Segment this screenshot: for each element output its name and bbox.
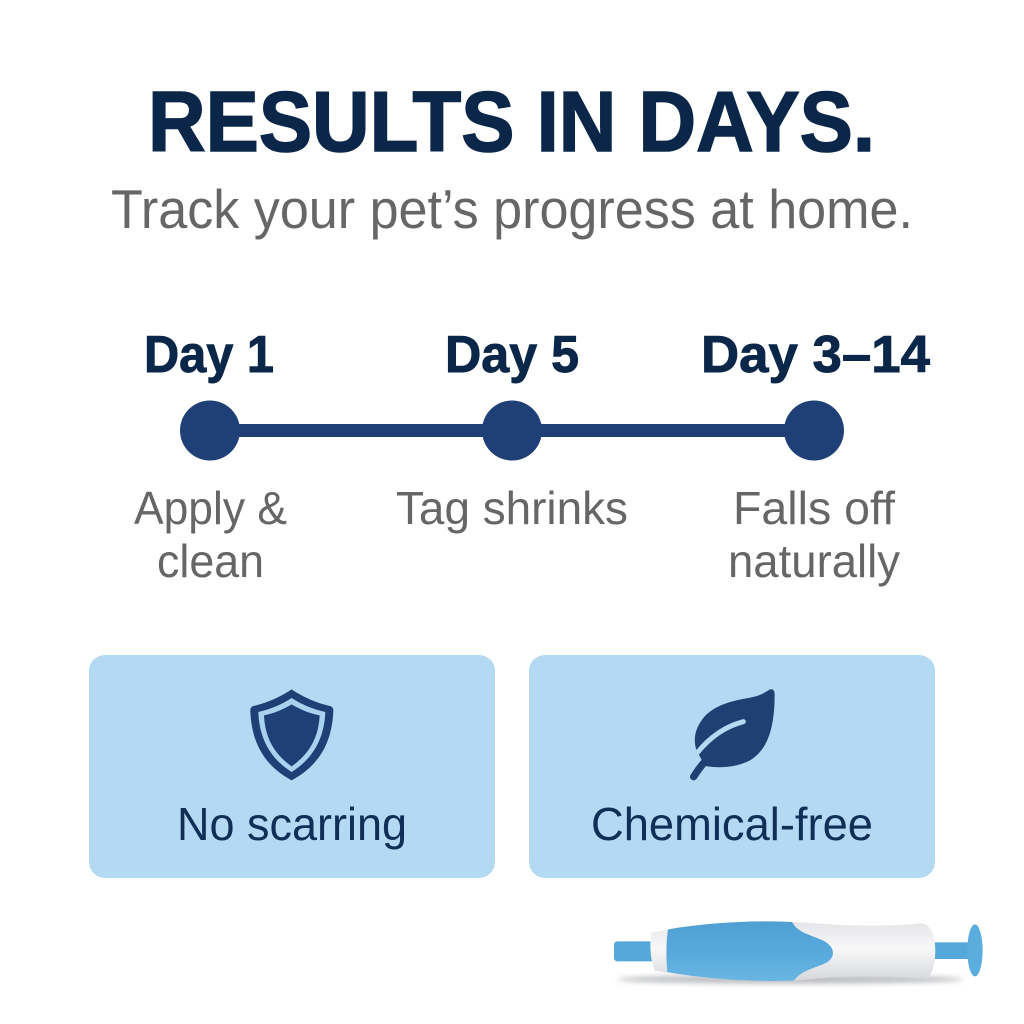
milestone: day 3-14: Falls off <box>733 482 895 534</box>
panel: chemical-free <box>529 655 935 878</box>
milestone: day 1 <box>134 326 287 587</box>
label: chemical-free: Chemical-free <box>591 798 873 850</box>
plunger rod <box>930 942 972 959</box>
timeline <box>134 326 930 587</box>
milestone: day 3-14: Day 3–14 <box>701 326 930 384</box>
plunger disc <box>967 924 983 976</box>
product: applicator pen <box>614 921 983 984</box>
milestone: day 3-14: naturally <box>728 535 900 587</box>
shadow <box>617 975 963 984</box>
white body <box>650 922 935 981</box>
milestone: day 1: Apply & <box>134 482 287 534</box>
timeline connector <box>210 424 814 437</box>
milestone: day 5 <box>396 326 628 534</box>
subtitle: Track your pet’s progress at home. <box>111 178 913 240</box>
milestone: day 1: Day 1 <box>144 326 274 384</box>
milestone: day 3-14 <box>701 326 930 587</box>
milestone: day 5: Tag shrinks <box>396 482 628 534</box>
label: no scarring: No scarring <box>177 798 407 850</box>
title: RESULTS IN DAYS. <box>148 75 875 170</box>
milestone: day 1: clean <box>157 535 264 587</box>
icon: shield <box>250 689 333 780</box>
milestone: day 5: Day 5 <box>445 326 579 384</box>
panel: no scarring <box>89 655 495 878</box>
blue grip <box>666 921 833 981</box>
icon: leaf <box>694 689 775 777</box>
rear tip <box>614 941 656 961</box>
